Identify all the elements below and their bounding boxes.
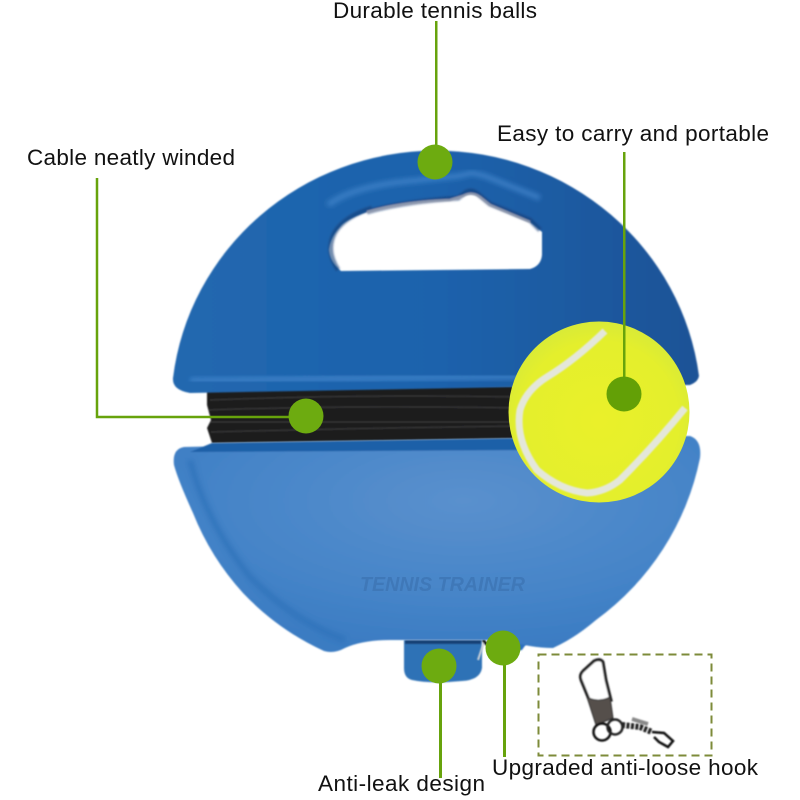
anti-leak neck [404, 640, 482, 682]
callout: cable neatly winded: Cable neatly winded [27, 145, 235, 170]
callout: easy to carry and portable: Easy to carry and portable [497, 121, 769, 146]
cable winding [207, 386, 540, 443]
bottom half of base [174, 436, 700, 652]
handle hole shadow rim [331, 191, 540, 270]
top half of base with handle [173, 151, 699, 393]
icon: swivel snap hook [580, 660, 673, 747]
tennis trainer product [173, 151, 700, 682]
callout: upgraded anti-loose hook: Upgraded anti-loose hook [492, 755, 759, 780]
callout: easy to carry and portable [497, 121, 769, 412]
tennis ball [508, 322, 690, 502]
callout: upgraded anti-loose hook [486, 630, 759, 780]
hook attachment [478, 640, 527, 660]
callout: durable tennis balls [333, 0, 537, 180]
callout: cable neatly winded [27, 145, 324, 434]
handle rim highlight [328, 173, 540, 205]
embossed label: TENNIS TRAINER [360, 574, 526, 596]
hook detail panel [538, 654, 712, 756]
callout: anti-leak design [318, 648, 485, 796]
callout: anti-leak design: Anti-leak design [318, 771, 485, 796]
